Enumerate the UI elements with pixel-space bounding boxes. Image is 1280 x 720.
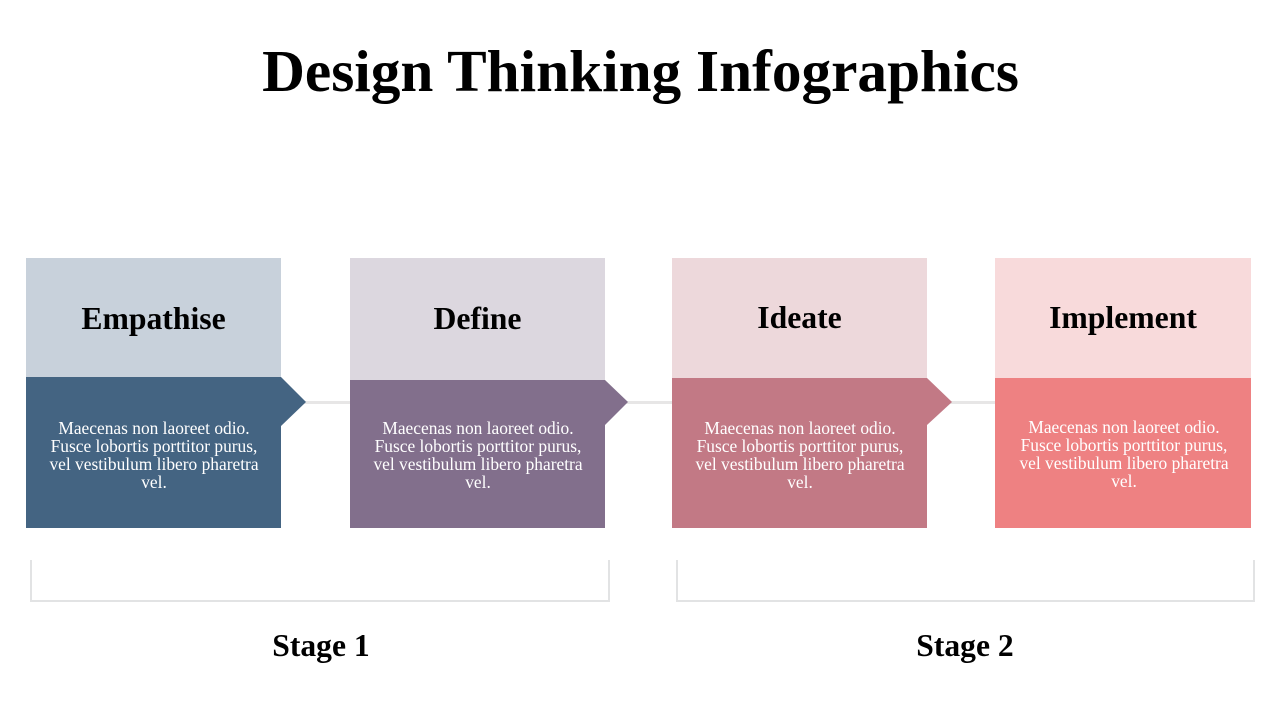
arrow: ideate bbox=[927, 378, 952, 425]
body box: empathise bbox=[26, 377, 281, 528]
body box: define: vel. bbox=[465, 472, 491, 492]
heading box: ideate: Ideate bbox=[757, 300, 842, 335]
body box: empathise: vel vestibulum libero pharetra bbox=[49, 454, 259, 474]
bracket: stage 2 bbox=[676, 560, 1255, 602]
body box: implement: vel vestibulum libero pharetra bbox=[1019, 453, 1229, 473]
heading box: define: Define bbox=[434, 301, 522, 336]
label: stage 2: Stage 2 bbox=[916, 628, 1014, 663]
body box: implement: Fusce lobortis porttitor purus, bbox=[1021, 435, 1227, 455]
body box: ideate: Fusce lobortis porttitor purus, bbox=[697, 436, 903, 456]
body box: define: Maecenas non laoreet odio. bbox=[382, 418, 574, 438]
body box: define: vel vestibulum libero pharetra bbox=[373, 454, 583, 474]
heading box: ideate bbox=[672, 258, 927, 378]
body box: ideate: Maecenas non laoreet odio. bbox=[704, 418, 896, 438]
panel: ideate bbox=[672, 258, 952, 528]
connector line bbox=[281, 401, 1011, 404]
body box: implement: vel. bbox=[1111, 471, 1137, 491]
body box: ideate: vel. bbox=[787, 472, 813, 492]
body box: empathise: vel. bbox=[141, 472, 167, 492]
body box: implement: Maecenas non laoreet odio. bbox=[1028, 417, 1220, 437]
body box: define: Fusce lobortis porttitor purus, bbox=[375, 436, 581, 456]
body box: empathise: Maecenas non laoreet odio. bbox=[58, 418, 250, 438]
heading box: define bbox=[350, 258, 605, 380]
body box: implement bbox=[995, 378, 1251, 528]
panel: implement bbox=[995, 258, 1251, 528]
heading box: empathise: Empathise bbox=[81, 301, 226, 336]
heading box: implement bbox=[995, 258, 1251, 378]
title: Design Thinking Infographics bbox=[262, 38, 1019, 104]
heading box: implement: Implement bbox=[1049, 300, 1197, 335]
body box: ideate bbox=[672, 378, 927, 528]
body box: define bbox=[350, 380, 605, 528]
panel: empathise bbox=[26, 258, 306, 528]
arrow: define bbox=[605, 380, 628, 425]
panel: define bbox=[350, 258, 628, 528]
body box: ideate: vel vestibulum libero pharetra bbox=[695, 454, 905, 474]
label: stage 1: Stage 1 bbox=[272, 628, 370, 663]
arrow: empathise bbox=[281, 377, 306, 426]
body box: empathise: Fusce lobortis porttitor purus, bbox=[51, 436, 257, 456]
bracket: stage 1 bbox=[30, 560, 610, 602]
heading box: empathise bbox=[26, 258, 281, 377]
